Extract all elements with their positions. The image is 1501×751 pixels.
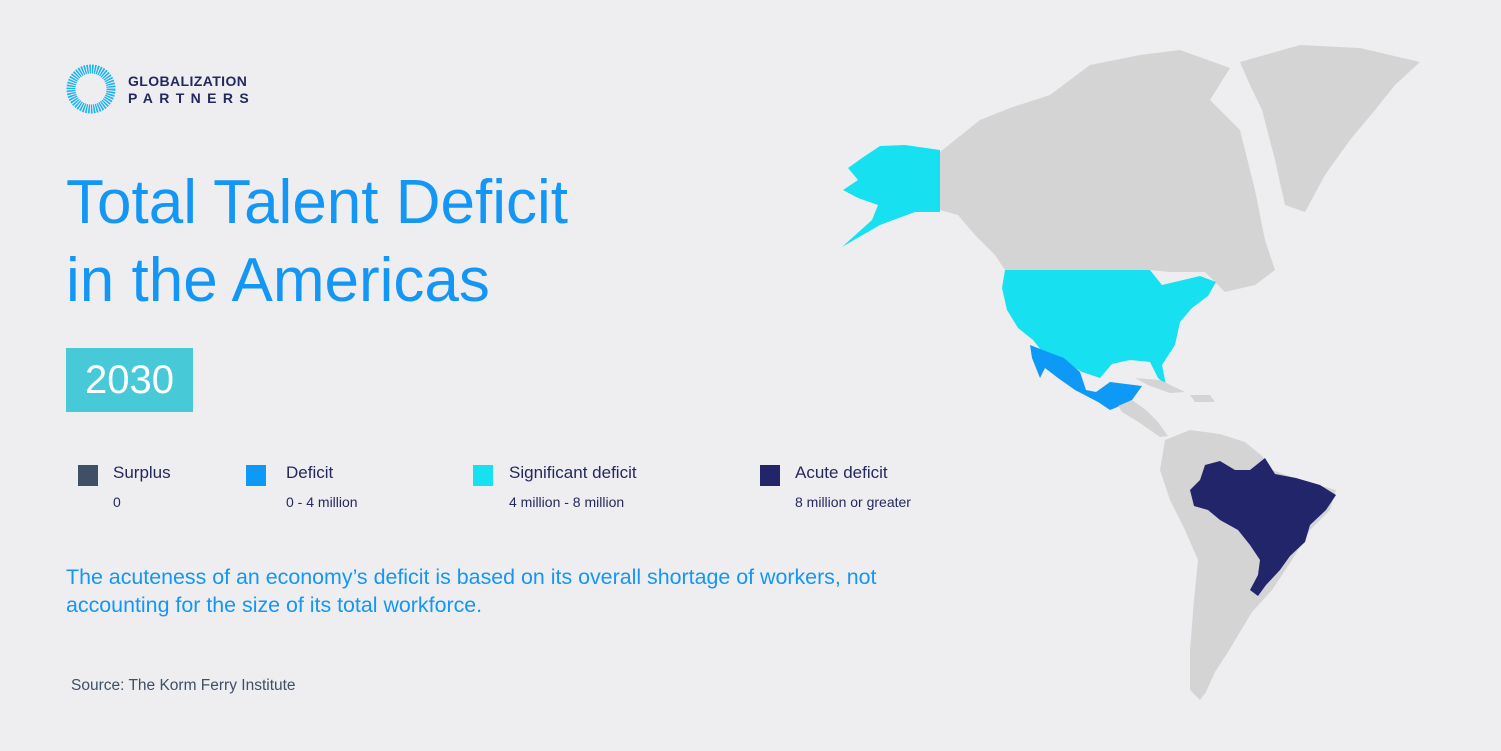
- region: south america: [1160, 430, 1336, 700]
- title: [66, 168, 568, 315]
- legend: significant deficit: 4 million - 8 million: [509, 494, 624, 510]
- legend: [78, 463, 911, 510]
- region: central america & caribbean: [1118, 378, 1215, 437]
- region: greenland: [1240, 45, 1420, 212]
- logo text: [128, 73, 255, 106]
- legend: significant deficit: [473, 463, 637, 510]
- year badge: 2030: [85, 358, 174, 402]
- legend: acute deficit: Acute deficit: [795, 463, 888, 482]
- region: brazil: [1190, 458, 1336, 596]
- note text: The acuteness of an economy’s deficit is based on its overall shortage of workers, not accounting for the size of its total workforce.: [66, 565, 877, 617]
- legend: acute deficit: 8 million or greater: [795, 494, 911, 510]
- region: usa: [1002, 270, 1216, 385]
- legend: deficit: [246, 463, 358, 510]
- legend: deficit: 0 - 4 million: [286, 494, 358, 510]
- legend: significant deficit: Significant deficit: [509, 463, 637, 482]
- legend: deficit: Deficit: [286, 463, 333, 482]
- title: Total Talent Deficit: [66, 168, 568, 237]
- year badge: [66, 348, 193, 412]
- logo: [66, 64, 255, 114]
- source: Source: The Korm Ferry Institute: [71, 677, 296, 694]
- region: mexico: [1030, 345, 1142, 410]
- title: in the Americas: [66, 246, 490, 315]
- logo text: PARTNERS: [128, 90, 255, 106]
- region: canada: [940, 50, 1275, 292]
- logo text: GLOBALIZATION: [128, 73, 247, 89]
- legend: surplus: 0: [113, 494, 121, 510]
- region: alaska: [842, 145, 940, 247]
- icon: ring: [66, 64, 116, 114]
- legend: acute deficit: [760, 463, 911, 510]
- legend: surplus: [78, 463, 171, 510]
- legend: surplus: Surplus: [113, 463, 171, 482]
